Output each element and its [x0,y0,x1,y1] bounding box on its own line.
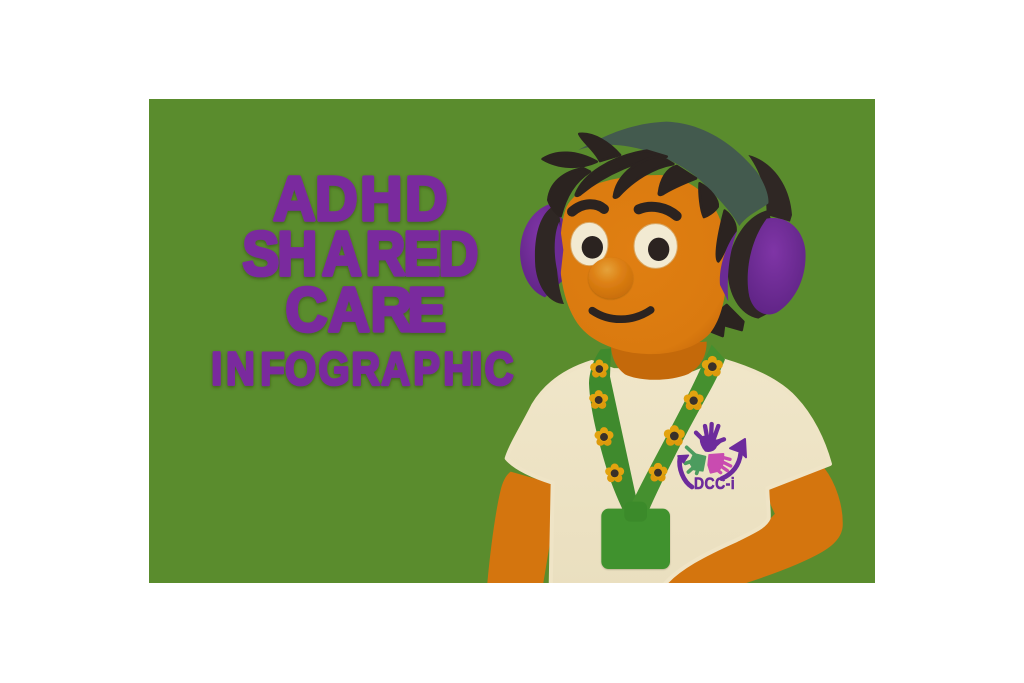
title line: ADHD: ADHD [273,164,448,233]
neck [611,342,707,380]
right pupil [648,238,669,261]
left eyebrow [572,204,604,212]
left pupil [582,236,603,259]
hair lock at temple [717,211,736,261]
left arm [487,472,554,583]
logo arrowhead [730,439,746,457]
left ear cup inner sliver [555,222,563,280]
nose [588,257,633,299]
title line: CARE: CARE [286,275,446,344]
title line: INFOGRAPHIC: INFOGRAPHIC [211,344,513,395]
hair side [548,168,590,216]
left headphone band [535,206,564,304]
hair swoosh [576,151,667,196]
hair spike far left [543,153,597,167]
beanie cap [578,122,768,226]
green hand [685,447,705,473]
right ear cup inner sliver [720,231,737,302]
headband behind cap [748,155,792,222]
green background panel [149,99,875,583]
id card clip [630,502,647,508]
infographic canvas [149,99,875,583]
hair spike top [579,134,620,161]
left eye white [571,222,608,266]
t-shirt [507,361,830,587]
purple hand [696,424,724,451]
hair [543,134,736,261]
right eye white [634,224,677,268]
hair fringe middle [614,156,673,198]
left eye [571,222,608,266]
right ear cup [748,218,806,314]
character head [520,122,806,354]
lanyard left strap [589,348,636,509]
hair at back of neck [712,305,743,336]
face [560,175,727,354]
character body [487,342,842,587]
sunflowers [589,356,723,482]
title [211,164,513,395]
mouth [592,310,651,319]
DCC-i logo [678,424,746,494]
right arm [662,468,842,583]
lanyard right strap [636,344,725,509]
hair fringe right [659,166,696,195]
hair lock [700,183,718,217]
right eyebrow [639,207,677,216]
left headphone ear cup [520,204,563,297]
logo arc left [680,457,692,487]
title line: SHARED: SHARED [242,220,478,289]
right eye [634,224,677,268]
pink hand [708,454,731,473]
logo text: DCC-i [694,475,735,494]
logo arrow right [722,453,741,479]
right headphone band [728,210,771,319]
lanyard [589,345,725,569]
id card [601,509,670,569]
